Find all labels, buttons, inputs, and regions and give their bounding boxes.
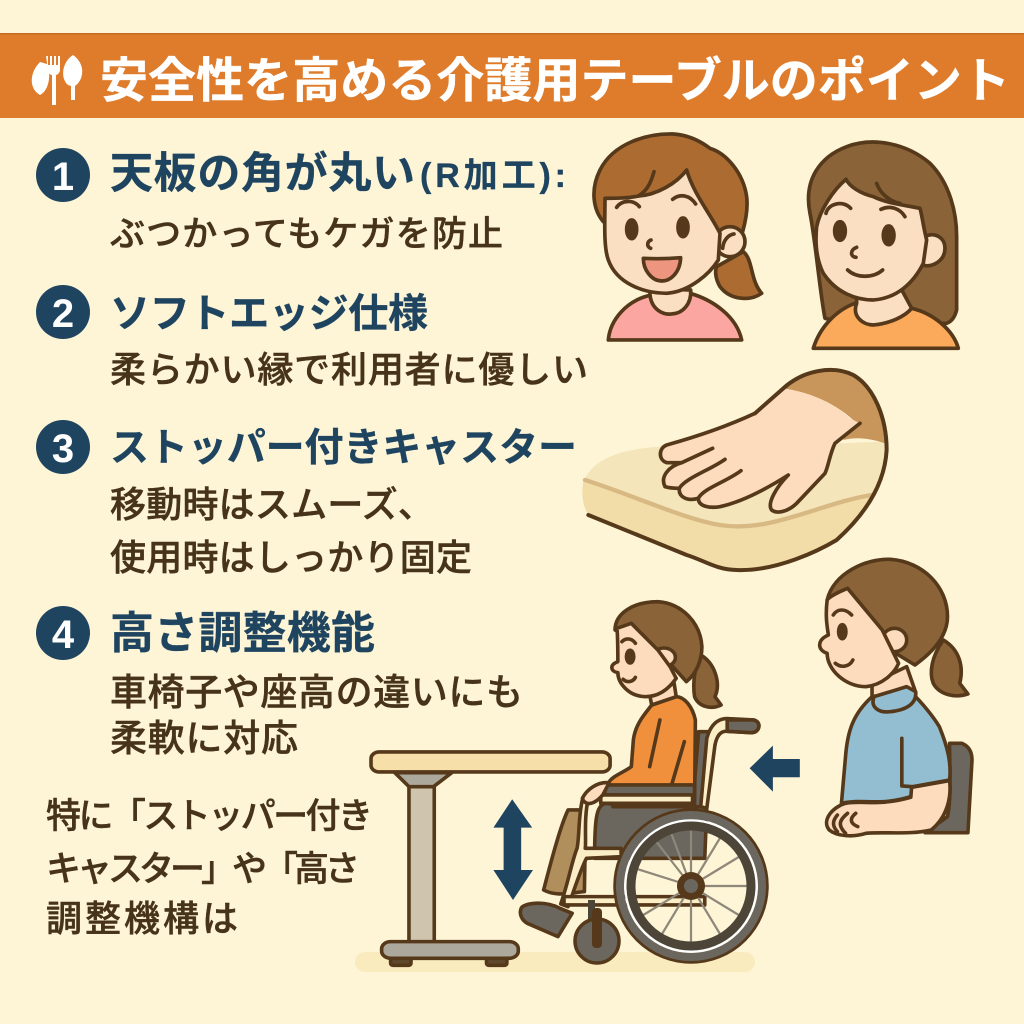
backrest	[693, 732, 717, 808]
sleeve	[783, 370, 885, 443]
icon: leaf, fork and spoon	[32, 55, 82, 105]
heading 1: (R加工):	[420, 157, 566, 195]
number badge 1: 1	[52, 155, 74, 199]
point 4	[36, 606, 523, 759]
description 4	[110, 672, 523, 759]
point 2	[36, 285, 588, 390]
heading 2: ソフトエッジ仕様	[110, 292, 428, 336]
number badge 2	[36, 285, 90, 339]
front frame tube	[561, 798, 621, 907]
arrow: push table toward wheelchair	[750, 746, 800, 792]
heading 4: 高さ調整機能	[110, 609, 375, 658]
shirt	[841, 692, 950, 803]
point 1	[36, 148, 566, 254]
illustration: carer	[820, 559, 972, 836]
face	[882, 628, 907, 652]
hand	[582, 783, 609, 804]
number badge 4	[36, 606, 90, 660]
title banner	[0, 33, 1024, 118]
number badge 2: 2	[52, 292, 74, 336]
cushion top	[583, 442, 885, 570]
description 2: 柔らかい縁で利用者に優しい	[110, 349, 588, 390]
illustration: smiling woman	[809, 142, 958, 348]
number badge 3	[36, 420, 90, 474]
hair	[827, 559, 948, 665]
description 3: 移動時はスムーズ、	[110, 484, 434, 525]
number badge 4: 4	[52, 613, 75, 657]
cushion front	[582, 480, 872, 570]
description 4: 車椅子や座高の違いにも	[110, 672, 523, 713]
handle frame	[701, 719, 759, 808]
closing note: 調整機構は	[46, 898, 238, 939]
arrow: height adjustment	[493, 799, 533, 900]
edge stripe	[585, 480, 872, 526]
description 4: 柔軟に対応	[110, 718, 298, 759]
illustration: hand pressing soft table edge	[582, 370, 887, 570]
number badge 3: 3	[52, 427, 74, 471]
hand	[660, 388, 860, 512]
illustration: woman in wheelchair	[520, 602, 767, 963]
heading 3: ストッパー付きキャスター	[110, 427, 577, 470]
illustration: smiling girl	[594, 134, 762, 340]
big wheel	[615, 810, 767, 962]
point 3	[36, 420, 577, 578]
closing note: 特に「ストッパー付き	[46, 797, 373, 836]
ground shadow	[355, 952, 755, 972]
legs	[544, 810, 585, 894]
seat cushion	[595, 803, 707, 858]
caster wheel	[575, 900, 619, 963]
neck	[872, 667, 915, 697]
armrest	[605, 785, 695, 795]
hair	[615, 602, 702, 682]
ponytail	[931, 640, 968, 696]
illustration: overbed table	[371, 752, 610, 965]
chair	[925, 743, 972, 833]
outline	[588, 370, 887, 570]
ponytail	[694, 655, 721, 707]
description 1: ぶつかってもケガを防止	[110, 215, 503, 254]
heading 1	[110, 150, 566, 198]
neck	[650, 683, 676, 705]
face	[653, 648, 675, 667]
description 3	[110, 484, 472, 578]
torso	[609, 697, 695, 807]
title text: 安全性を高める介護用テーブルのポイント	[100, 55, 1010, 108]
description 3: 使用時はしっかり固定	[110, 537, 472, 578]
closing note	[46, 797, 373, 939]
number badge 1	[36, 148, 90, 202]
foot	[520, 903, 572, 937]
closing note: キャスター」や「高さ	[46, 850, 360, 889]
arm and hand	[827, 781, 950, 836]
heading 1: 天板の角が丸い	[110, 150, 415, 198]
